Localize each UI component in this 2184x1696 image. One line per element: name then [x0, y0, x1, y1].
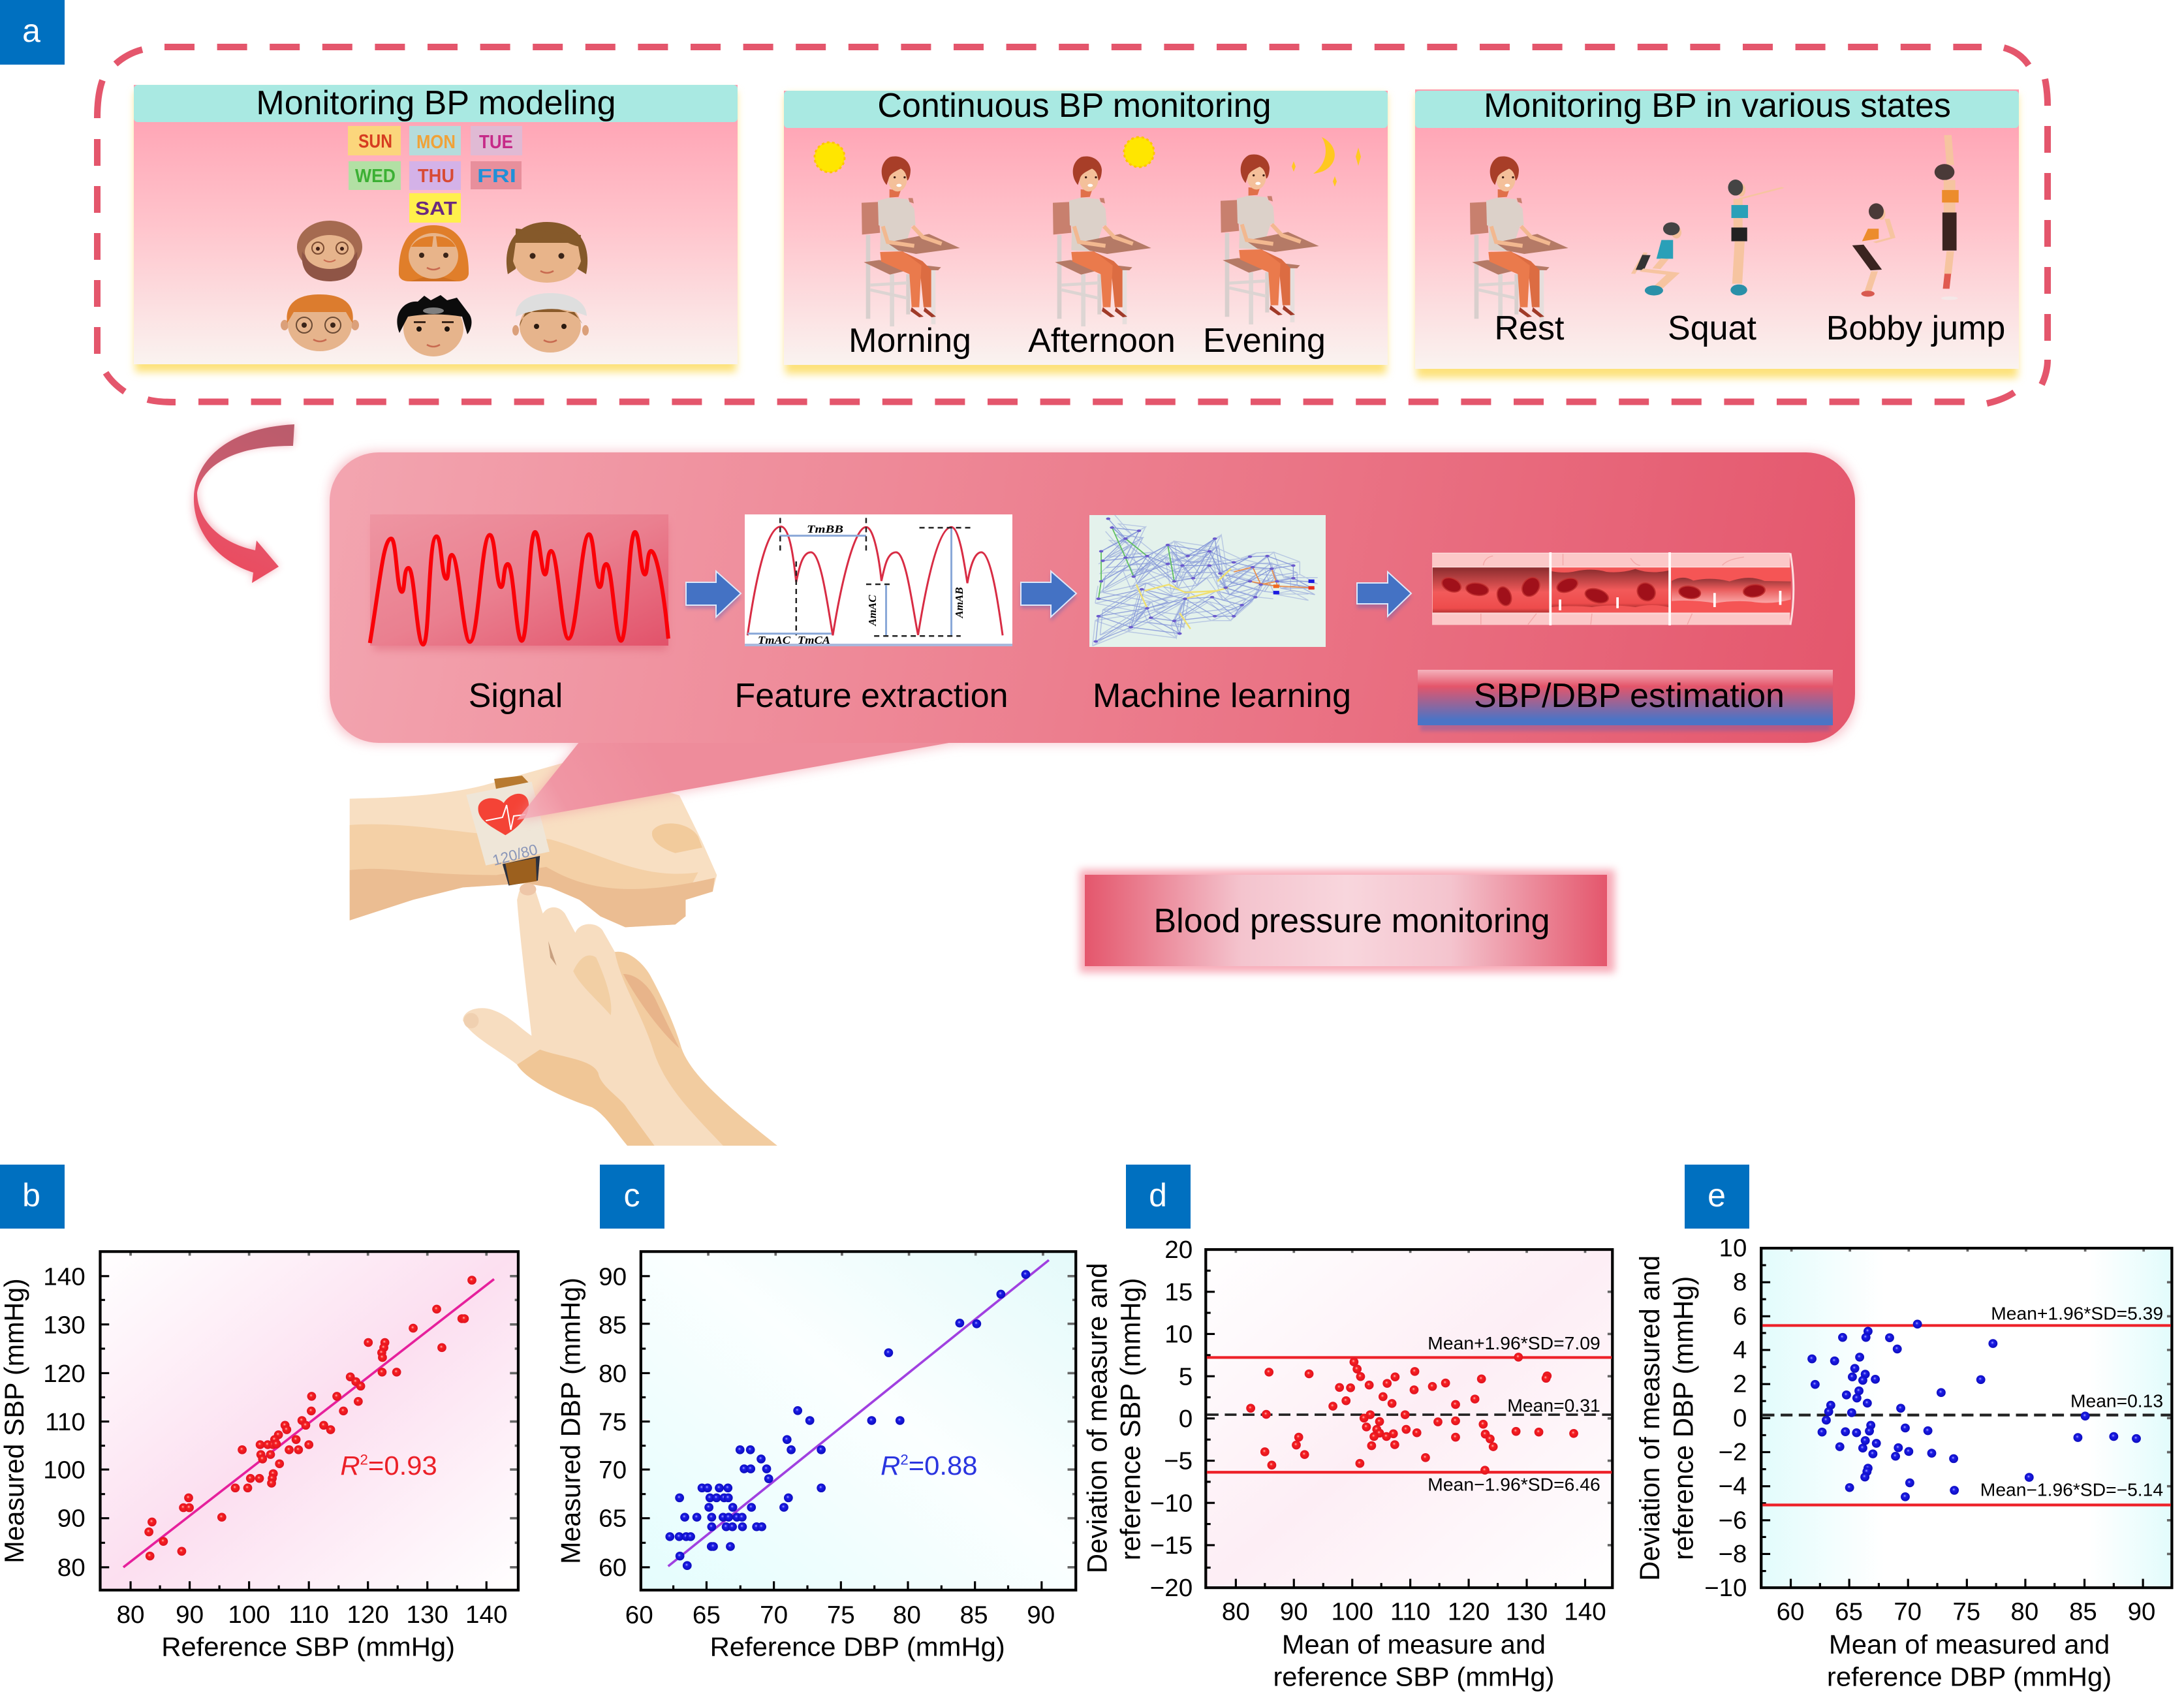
axis tick labels: 75	[599, 1408, 627, 1436]
label: morning: Morning	[849, 322, 971, 360]
icon: face with cap	[512, 293, 589, 353]
arrow: feature extraction to machine learning	[1021, 571, 1076, 621]
axis tick labels: 120	[43, 1360, 86, 1388]
axis tick labels: −2	[1719, 1439, 1747, 1466]
R squared annotation: R	[340, 1450, 360, 1481]
x axis title: reference DBP (mmHg)	[1827, 1662, 2112, 1691]
axis tick labels: 65	[599, 1505, 627, 1533]
icon: weekday notes: THU	[418, 166, 454, 187]
x axis title: Mean of measure and	[1282, 1629, 1546, 1659]
axis tick labels: 80	[1222, 1598, 1250, 1626]
axis tick labels: −6	[1719, 1507, 1747, 1534]
axis tick labels: −5	[1164, 1447, 1193, 1475]
chart e: DBP Bland-Altman plot	[1634, 1235, 2172, 1691]
icon: face with brown hair	[507, 222, 587, 283]
axis tick labels: 75	[1952, 1599, 1980, 1626]
R squared annotation: R	[881, 1450, 900, 1481]
line annotations: Mean+1.96*SD=7.09	[1427, 1333, 1600, 1353]
axis tick labels: 65	[1835, 1599, 1863, 1626]
y axis title: reference SBP (mmHg)	[1115, 1278, 1146, 1560]
axis tick labels: 60	[599, 1554, 627, 1582]
axis tick labels: 130	[43, 1311, 86, 1339]
y axis title	[1634, 1255, 1699, 1581]
icon: bobby jump figures	[1858, 135, 1959, 300]
chart d: SBP Bland-Altman plot	[1082, 1236, 1612, 1691]
axis tick labels: 4	[1733, 1337, 1747, 1364]
arrow: curved from scenarios to processing panel	[193, 424, 294, 583]
data points	[665, 1270, 1030, 1570]
icon: weekday notes: FRI	[477, 166, 516, 187]
icon: weekday notes	[348, 126, 522, 223]
data points	[1807, 1320, 2141, 1501]
chart: neural network	[1089, 515, 1326, 647]
line annotations: Mean−1.96*SD=−5.14	[1980, 1480, 2163, 1500]
arrow: machine learning to estimation	[1357, 572, 1411, 621]
axis tick labels: 85	[2069, 1599, 2097, 1626]
axis tick labels: 6	[1733, 1303, 1747, 1330]
axis tick labels: 10	[1164, 1321, 1193, 1348]
axis tick labels: 0	[1733, 1405, 1747, 1432]
axis tick labels: 8	[1733, 1269, 1747, 1296]
chart b: measured vs reference SBP scatter	[0, 1251, 518, 1661]
icon: seated person evening	[1221, 155, 1319, 324]
line annotations	[1427, 1333, 1600, 1494]
y axis title	[1082, 1263, 1146, 1573]
axis tick labels: 120	[347, 1601, 389, 1629]
feature labels: TmCA	[798, 634, 830, 646]
x axis title: Reference SBP (mmHg)	[161, 1631, 455, 1661]
label: afternoon: Afternoon	[1028, 322, 1176, 360]
y axis title: Measured DBP (mmHg)	[555, 1278, 586, 1564]
heading: continuous BP monitoring: Continuous BP monitoring	[877, 87, 1271, 125]
icon: afternoon sun	[1124, 137, 1154, 167]
axis tick labels: 110	[289, 1601, 329, 1629]
feature labels: TmBB	[807, 523, 843, 535]
panel label: b	[0, 1165, 65, 1229]
data points	[144, 1276, 476, 1560]
axis tick labels: 90	[2128, 1599, 2155, 1626]
axis tick labels: 90	[599, 1263, 627, 1291]
label: squat: Squat	[1668, 309, 1756, 347]
chart c: measured vs reference DBP scatter	[555, 1251, 1076, 1661]
icon: weekday notes: TUE	[479, 132, 513, 153]
chart: signal waveform	[370, 514, 668, 650]
heading: monitoring BP in various states: Monitoring BP in various states	[1484, 87, 1951, 125]
line annotations: Mean=0.13	[2070, 1391, 2163, 1411]
panel: signal processing pipeline	[330, 452, 1855, 820]
fit line	[123, 1279, 494, 1567]
axis tick labels: 90	[57, 1505, 86, 1533]
label: machine learning: Machine learning	[1093, 677, 1351, 715]
axis tick labels: 0	[1179, 1405, 1193, 1433]
heading: monitoring BP modeling: Monitoring BP modeling	[256, 84, 616, 122]
axis tick labels: 80	[599, 1360, 627, 1388]
line annotations: Mean+1.96*SD=5.39	[1991, 1304, 2163, 1323]
R squared annotation: 2	[900, 1451, 909, 1468]
axis tick labels: 80	[893, 1601, 921, 1629]
axis tick labels	[1150, 1236, 1606, 1626]
axis tick labels: 75	[827, 1601, 855, 1629]
x axis title	[1273, 1629, 1554, 1691]
icon: squat figures	[1633, 180, 1783, 296]
R squared annotation: =0.93	[368, 1450, 437, 1481]
y axis title: Deviation of measure and	[1082, 1263, 1112, 1573]
axis tick labels: 10	[1719, 1235, 1747, 1262]
chart: feature extraction diagram	[745, 514, 1012, 646]
limits of agreement and mean lines	[1762, 1325, 2171, 1505]
panel: continuous BP monitoring	[784, 87, 1388, 374]
axis tick labels: 70	[599, 1456, 627, 1484]
icon: seated person afternoon	[1053, 157, 1151, 326]
label box: SBP/DBP estimation	[1418, 670, 1833, 731]
feature labels: AmAC	[866, 595, 879, 627]
arrow: signal to feature extraction	[686, 571, 741, 621]
axis tick labels: 90	[176, 1601, 204, 1629]
axis tick labels: −10	[1150, 1490, 1193, 1517]
axis tick labels: 100	[43, 1456, 86, 1484]
icon: face with black spiky hair	[397, 295, 471, 356]
x axis title: Reference DBP (mmHg)	[710, 1631, 1005, 1661]
axis tick labels: −20	[1150, 1574, 1193, 1602]
axis tick labels: 15	[1164, 1278, 1193, 1306]
axis tick labels: −10	[1704, 1575, 1747, 1602]
panel: monitoring BP in various states	[1415, 87, 2019, 378]
label: rest: Rest	[1495, 309, 1565, 347]
panel label: c: c	[624, 1177, 640, 1214]
axis tick labels	[599, 1263, 1055, 1629]
forearm and fist	[350, 762, 717, 927]
axis tick labels: 65	[693, 1601, 721, 1629]
panel label: a	[0, 0, 65, 65]
axis tick labels: 100	[228, 1601, 270, 1629]
icon: weekday notes: SAT	[415, 198, 457, 219]
axis tick labels: 70	[1894, 1599, 1922, 1626]
feature labels: TmAC	[758, 634, 791, 646]
axis tick labels: 60	[1777, 1599, 1804, 1626]
axis tick labels: 140	[465, 1601, 507, 1629]
axis tick labels: 80	[2011, 1599, 2038, 1626]
x axis title	[1827, 1629, 2112, 1691]
axis tick labels: 90	[1027, 1601, 1055, 1629]
label box: blood pressure monitoring: Blood pressure monitoring	[1154, 902, 1550, 940]
axis tick labels: 60	[625, 1601, 653, 1629]
axis tick labels: −8	[1719, 1541, 1747, 1568]
axis tick labels	[43, 1263, 507, 1629]
line annotations: Mean−1.96*SD=6.46	[1427, 1475, 1600, 1494]
axis tick labels: −4	[1719, 1473, 1747, 1500]
icon: weekday notes: MON	[416, 132, 456, 153]
icon: weekday notes: SUN	[358, 131, 392, 152]
axis tick labels: 110	[1390, 1598, 1430, 1626]
limits of agreement and mean lines	[1207, 1357, 1612, 1472]
illustration: second hand touching device	[463, 883, 777, 1146]
x axis title: reference SBP (mmHg)	[1273, 1662, 1554, 1691]
icon: face with orange hair	[399, 225, 469, 281]
panel label: b: b	[22, 1177, 40, 1214]
axis tick labels: 130	[1506, 1598, 1548, 1626]
axis tick labels: 100	[1332, 1598, 1373, 1626]
illustration: forearm with wearable device	[350, 762, 717, 927]
axis tick labels: 2	[1733, 1371, 1747, 1398]
fit line	[668, 1260, 1049, 1566]
axis tick labels: 90	[1280, 1598, 1308, 1626]
icon: seated person morning	[862, 157, 960, 326]
y axis title: reference DBP (mmHg)	[1668, 1276, 1699, 1560]
axis tick labels: 110	[45, 1408, 86, 1436]
axis tick labels: 130	[407, 1601, 448, 1629]
label: signal: Signal	[469, 677, 563, 715]
icon: face with glasses and orange hair	[281, 294, 359, 351]
axis tick labels: 20	[1164, 1236, 1193, 1264]
axis tick labels: 85	[960, 1601, 988, 1629]
line annotations: Mean=0.31	[1507, 1396, 1600, 1415]
panel label: e	[1685, 1165, 1749, 1229]
axis tick labels: 140	[1564, 1598, 1606, 1626]
axis tick labels: 85	[599, 1311, 627, 1339]
dashed frame around monitoring scenarios	[97, 47, 2048, 403]
illustration: blood vessel	[1432, 552, 1794, 625]
icon: weekday notes: WED	[355, 166, 396, 187]
feature labels	[758, 523, 965, 646]
feature labels: AmAB	[953, 587, 965, 619]
line annotations	[1980, 1304, 2163, 1500]
label box: blood pressure monitoring	[1080, 870, 1615, 973]
axis tick labels	[1704, 1235, 2155, 1626]
data points	[1246, 1353, 1578, 1475]
panel label: c	[600, 1165, 664, 1229]
panel: monitoring BP modeling	[134, 84, 738, 372]
icon: seated person at rest	[1470, 157, 1568, 326]
icon: morning sun	[815, 142, 845, 172]
axis tick labels: 140	[43, 1263, 86, 1291]
axis tick labels: 70	[760, 1601, 788, 1629]
R squared annotation: =0.88	[909, 1450, 978, 1481]
label: evening: Evening	[1203, 322, 1326, 360]
label: bobby jump: Bobby jump	[1826, 309, 2005, 347]
axis tick labels: −15	[1150, 1531, 1193, 1560]
axis tick labels: 80	[117, 1601, 145, 1629]
y axis title: Deviation of measured and	[1634, 1255, 1665, 1581]
panel label: e: e	[1708, 1177, 1726, 1214]
icon: face with beard and glasses	[297, 221, 362, 281]
panel label: d: d	[1149, 1177, 1167, 1214]
R squared annotation: 2	[360, 1451, 368, 1468]
panel label: d	[1126, 1165, 1191, 1229]
axis tick labels: 80	[57, 1554, 86, 1582]
label: feature extraction: Feature extraction	[734, 677, 1008, 715]
x axis title: Mean of measured and	[1829, 1629, 2110, 1659]
axis tick labels: 5	[1179, 1363, 1193, 1391]
illustration: forearm with wearable device: 120/80	[491, 841, 539, 869]
label box: SBP/DBP estimation: SBP/DBP estimation	[1474, 677, 1785, 715]
panel label: a: a	[22, 12, 40, 49]
axis tick labels: 120	[1448, 1598, 1490, 1626]
icon: evening moon and stars	[1292, 137, 1361, 187]
